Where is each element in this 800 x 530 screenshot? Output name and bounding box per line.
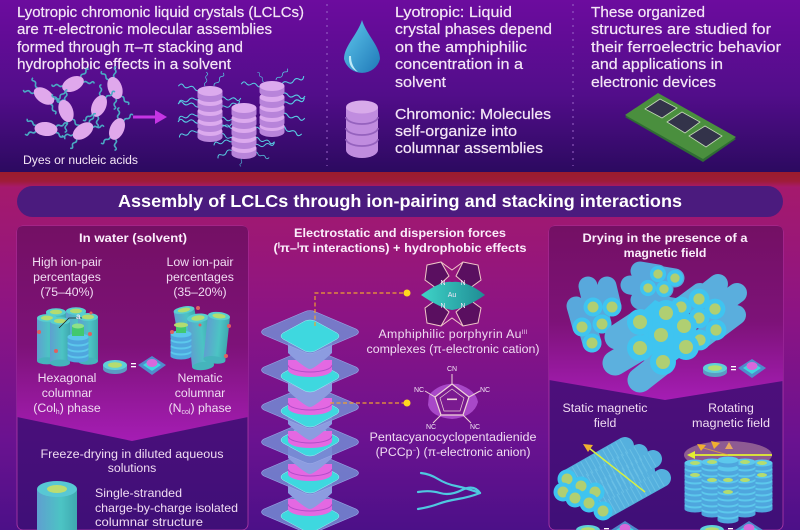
- text: lyotropic: Lyotropic: Liquid: [395, 5, 512, 21]
- nematic column diagram: [170, 305, 231, 371]
- static field label: field: [594, 416, 616, 430]
- nematic phase label: [169, 371, 232, 416]
- PCCp label: −: [412, 448, 416, 454]
- molecule: PCCp anion: NC: [414, 387, 424, 394]
- high ion-pair label: High ion-pair: [32, 255, 102, 269]
- dotted divider right: [572, 4, 574, 166]
- building block key: [103, 356, 166, 375]
- PCCp label: ) (π-electronic anion): [416, 445, 530, 459]
- panel: magnetic field: [549, 226, 783, 530]
- leader line: anion: [330, 400, 410, 406]
- low ion-pair label: [166, 255, 234, 299]
- text: chromonic: Chromonic: Molecules: [395, 107, 551, 123]
- red divider band: [0, 172, 800, 187]
- panel heading: Drying in the presence of a: [582, 231, 748, 245]
- hexagonal phase label: h: [56, 409, 60, 416]
- rotating field label: [692, 401, 770, 430]
- intro text block: are π-electronic molecular assemblies: [17, 22, 272, 38]
- molecule: porphyrin: N: [460, 280, 466, 287]
- static field columns: [554, 444, 662, 520]
- freeze-drying label: Freeze-drying in diluted aqueous: [40, 447, 224, 461]
- text: lyotropic: [395, 5, 552, 91]
- text: applications: [591, 5, 781, 91]
- caption: dyes: Dyes or nucleic acids: [23, 155, 138, 167]
- text: applications: These organized: [591, 5, 705, 21]
- text: applications: structures are studied for: [591, 22, 771, 38]
- high ion-pair label: [32, 255, 102, 299]
- nematic phase label: ) phase: [190, 401, 232, 415]
- text: lyotropic: concentration in a: [395, 57, 524, 73]
- molecule: PCCp anion: CN: [447, 366, 457, 373]
- intro text block: [17, 5, 304, 73]
- panel: centre forces: [262, 226, 540, 530]
- panel: in water: [17, 226, 248, 530]
- centre heading: [274, 226, 527, 255]
- icon: dispersed dye molecules: [22, 66, 133, 151]
- molecule: PCCp anion: [414, 366, 490, 431]
- intro text block: formed through π–π stacking and: [17, 40, 243, 56]
- heading pill: Assembly of LCLCs through ion-pairing and stacking interactions: [118, 191, 682, 211]
- rotating field label: Rotating: [708, 401, 754, 415]
- high ion-pair label: percentages: [33, 270, 101, 284]
- nematic phase label: Nematic: [177, 371, 223, 385]
- single-stranded label: [95, 486, 238, 529]
- hexagonal column diagram: a: [76, 312, 81, 321]
- icon: water drop: [344, 20, 380, 73]
- PCCp label: (PCCp: [376, 445, 412, 459]
- low ion-pair label: percentages: [166, 270, 234, 284]
- columnar assemblies with side chains: [178, 69, 305, 166]
- icon: circuit board: [625, 93, 736, 162]
- panel heading: [582, 231, 748, 260]
- cylinder cluster: [572, 266, 737, 380]
- molecule: PCCp anion: NC: [426, 424, 436, 431]
- ion-pair stack: [262, 310, 358, 530]
- hexagonal phase label: [33, 371, 101, 416]
- nematic phase label: col: [182, 409, 191, 416]
- arrow: assembly direction: [133, 110, 167, 124]
- low ion-pair label: (35–20%): [173, 285, 227, 299]
- heading pill: [17, 186, 783, 217]
- text: lyotropic: crystal phases depend: [395, 22, 552, 38]
- hexagonal phase label: ) phase: [60, 401, 101, 415]
- high ion-pair label: (75–40%): [40, 285, 94, 299]
- PCCp label: [370, 430, 537, 459]
- arrow: rotating field directions: [687, 441, 772, 459]
- molecule: porphyrin: N: [440, 280, 446, 287]
- single-stranded label: Single-stranded: [95, 486, 182, 500]
- text: applications: electronic devices: [591, 75, 716, 91]
- key: rotating building block: [700, 521, 763, 530]
- porphyrin label: III: [522, 330, 528, 336]
- text: chromonic: columnar assemblies: [395, 141, 543, 157]
- molecule: porphyrin: N: [460, 303, 466, 310]
- intro text block: Lyotropic chromonic liquid crystals (LCLCs): [17, 5, 304, 21]
- low ion-pair label: Low ion-pair: [166, 255, 234, 269]
- centre heading: Electrostatic and dispersion forces: [294, 226, 506, 240]
- text: lyotropic: solvent: [395, 75, 446, 91]
- hexagonal phase label: (Col: [33, 401, 56, 415]
- freeze-drying label: solutions: [108, 461, 156, 475]
- panel heading: magnetic field: [624, 246, 706, 260]
- rotating field label: magnetic field: [692, 416, 770, 430]
- panel heading: In water (solvent): [79, 231, 187, 245]
- porphyrin label: [366, 327, 540, 356]
- centre heading: (ⁱπ–ⁱπ interactions) + hydrophobic effects: [274, 241, 527, 255]
- text: lyotropic: on the amphiphilic: [395, 40, 527, 56]
- dotted divider left: [326, 4, 328, 166]
- static field label: Static magnetic: [562, 401, 648, 415]
- text: chromonic: [395, 107, 551, 157]
- molecule: PCCp anion: NC: [480, 387, 490, 394]
- building block key: [703, 359, 766, 378]
- porphyrin label: complexes (π-electronic cation): [366, 342, 540, 356]
- text: applications: and applications in: [591, 57, 723, 73]
- intro text block: hydrophobic effects in a solvent: [17, 57, 231, 73]
- rotating field columns: [684, 441, 772, 524]
- molecule: PCCp anion: NC: [470, 424, 480, 431]
- nematic phase label: (N: [169, 401, 182, 415]
- text: applications: their ferroelectric behavior: [591, 40, 781, 56]
- porphyrin label: Amphiphilic porphyrin Au: [378, 327, 522, 341]
- key: static building block: [576, 521, 639, 530]
- icon: hydrophobic chains: [418, 473, 480, 509]
- molecule: porphyrin: Au: [448, 292, 456, 299]
- molecule: porphyrin: N: [440, 303, 446, 310]
- text: chromonic: self-organize into: [395, 124, 517, 140]
- leader line: cation: [315, 290, 410, 326]
- hexagonal column diagram: [37, 307, 98, 366]
- arrow: static field direction: [583, 444, 645, 492]
- icon: molecular stack: [346, 100, 378, 158]
- static field label: [562, 401, 648, 430]
- nematic phase label: columnar: [175, 386, 225, 400]
- freeze-drying label: [40, 447, 224, 475]
- hexagonal phase label: Hexagonal: [38, 371, 96, 385]
- single-stranded label: columnar structure: [95, 515, 203, 529]
- hexagonal phase label: columnar: [42, 386, 92, 400]
- background: top section: [0, 0, 800, 172]
- single-stranded cylinder: [37, 481, 77, 530]
- single-stranded label: charge-by-charge isolated: [95, 501, 238, 515]
- molecule: porphyrin: [421, 262, 485, 326]
- background: lower section: [0, 172, 800, 530]
- PCCp label: Pentacyanocyclopentadienide: [370, 430, 537, 444]
